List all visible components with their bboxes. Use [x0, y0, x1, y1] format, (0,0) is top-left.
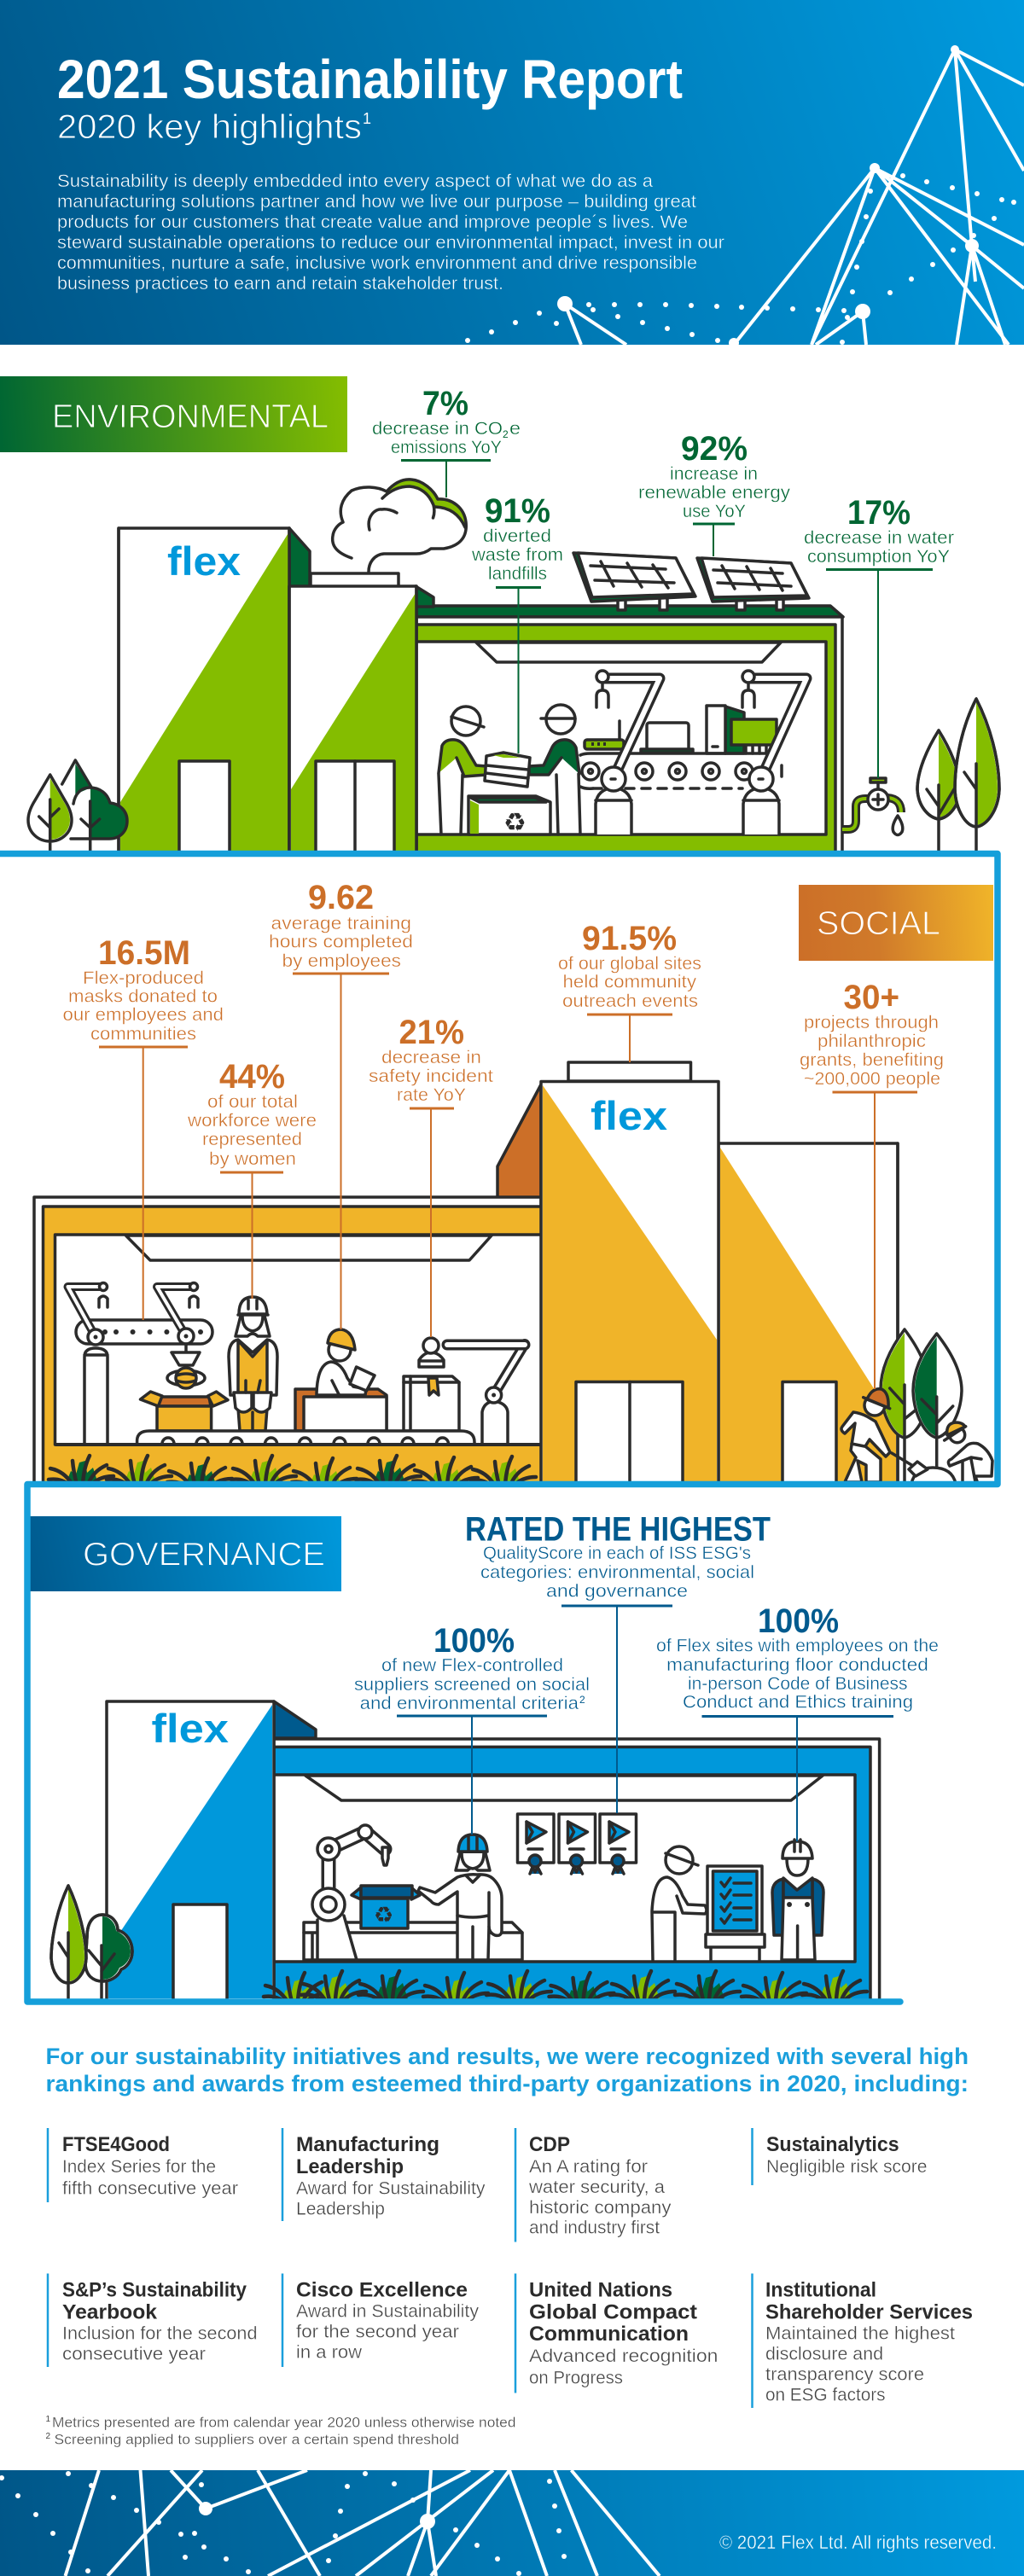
stat: 91% waste: diverted — [483, 526, 551, 546]
stat: 44% women: workforce were — [187, 1111, 317, 1131]
stat: 21% safety: rate YoY — [397, 1085, 466, 1105]
intro paragraph — [57, 172, 724, 294]
award: ISS: disclosure and — [765, 2345, 883, 2364]
section label: environmental — [0, 376, 347, 452]
person at checklist — [652, 1846, 707, 1960]
stat: 100% suppliers — [354, 1622, 590, 1835]
stat: 7% CO2e: e — [509, 419, 521, 439]
stat: 21% safety: decrease in — [381, 1048, 481, 1067]
stat: 7% CO2e: emissions YoY — [391, 438, 502, 457]
award: United Nations: on Progress — [529, 2369, 623, 2387]
award: CDP: water security, a — [528, 2178, 665, 2197]
stat: 100% suppliers: and environmental criteria — [360, 1694, 579, 1713]
work table and robot — [304, 1825, 522, 1960]
plants row governance — [264, 1971, 867, 2003]
stat: 30+ projects: philanthropic — [817, 1032, 926, 1051]
stat: 16.5M masks — [63, 934, 224, 1320]
stat: 17% water: consumption YoY — [807, 547, 950, 567]
panel: social — [34, 879, 993, 1488]
robot arm 1 — [596, 671, 660, 834]
stat: 44% women: by women — [209, 1149, 296, 1169]
stat: 7% CO2e: 7% — [422, 385, 468, 422]
award: S&P — [48, 2273, 258, 2367]
award: S&P: consecutive year — [62, 2345, 206, 2364]
stat: 100% training: Conduct and Ethics training — [683, 1693, 913, 1712]
award: United Nations: United Nations — [529, 2278, 672, 2302]
stat: 16.5M masks: Flex-produced — [83, 968, 204, 988]
stat: 9.62 training: by employees — [282, 951, 401, 971]
stat: 44% women: represented — [202, 1130, 302, 1149]
stat: 30+ projects: projects through — [804, 1013, 939, 1032]
tower — [119, 528, 310, 853]
footer network graphic — [0, 2470, 660, 2576]
award: ISS: Institutional — [765, 2278, 876, 2302]
stat: 91% waste: waste from — [471, 545, 563, 565]
award: CDP: An A rating for — [529, 2157, 648, 2177]
open box — [140, 1392, 228, 1431]
award: CDP: historic company — [529, 2198, 672, 2218]
stat: rated the highest: QualityScore in each of ISS ESG's — [483, 1544, 751, 1563]
award: Cisco — [282, 2273, 479, 2367]
award: ISS: Maintained the highest — [765, 2324, 955, 2343]
award: FTSE4Good — [48, 2128, 238, 2202]
copyright: © 2021 Flex Ltd. All rights reserved. — [719, 2532, 997, 2553]
awards heading — [46, 2044, 969, 2096]
trees left — [28, 760, 127, 851]
stat: 91.5% outreach: held community — [563, 973, 697, 991]
social building — [34, 1062, 992, 1488]
stat: 9.62 training: average training — [271, 914, 411, 933]
recycling box: ♻ — [374, 1903, 393, 1928]
trees right — [917, 699, 999, 852]
award: CDP: CDP — [529, 2133, 570, 2156]
subtitle: 2020 key highlights — [57, 108, 362, 146]
stat: 92% renewable: use YoY — [683, 502, 746, 521]
panel: environmental — [0, 376, 999, 854]
stat: 91% waste: landfills — [488, 564, 547, 584]
award: Cisco: in a row — [296, 2343, 363, 2362]
footer banner — [0, 2470, 1024, 2576]
award: ISS: transparency score — [765, 2365, 924, 2384]
stat: 100% suppliers: suppliers screened on social — [354, 1675, 590, 1695]
subtitle: 1 — [363, 110, 371, 127]
section label: governance — [30, 1516, 341, 1591]
stat: 91.5% outreach: 91.5% — [582, 920, 677, 957]
seated worker with tablet — [295, 1329, 387, 1431]
recycling box — [352, 1886, 420, 1928]
header banner — [0, 0, 1024, 348]
award: CDP — [515, 2128, 672, 2242]
camera robot arm — [419, 1338, 525, 1444]
stat: 44% women: of our total — [207, 1092, 298, 1112]
tower: flex — [167, 538, 241, 584]
stat: 92% renewable: increase in — [670, 464, 758, 484]
stat: 100% training — [656, 1602, 939, 1841]
certificates — [517, 1814, 637, 1874]
stat: 44% women: 44% — [219, 1058, 285, 1096]
woman with box — [418, 1835, 502, 1960]
section frame lines — [0, 853, 998, 2002]
award: Manufacturing Leadership — [282, 2128, 486, 2221]
intro paragraph: communities, nurture a safe, inclusive work environment and drive responsible — [57, 253, 697, 273]
award: FTSE4Good: Index Series for the — [62, 2157, 216, 2177]
stat: 9.62 training: hours completed — [269, 932, 413, 952]
panel: awards — [46, 2044, 973, 2447]
stat: 30+ projects: grants, benefiting — [800, 1050, 944, 1070]
stat: 100% training: in-person Code of Business — [688, 1674, 908, 1694]
award: Manufacturing Leadership: Leadership — [296, 2200, 385, 2218]
annex roof and body — [416, 606, 843, 854]
award: FTSE4Good: fifth consecutive year — [62, 2179, 238, 2198]
stat: 92% renewable: 92% — [681, 430, 748, 468]
stat: 7% CO2e — [372, 385, 521, 497]
award: United Nations — [515, 2273, 719, 2393]
stat: 100% suppliers: of new Flex-controlled — [381, 1655, 563, 1676]
intro paragraph: steward sustainable operations to reduce our environmental impact, invest in our — [57, 233, 724, 253]
second block and chimney — [289, 573, 433, 853]
section label: environmental: ENVIRONMENTAL — [52, 398, 329, 435]
tower — [107, 1701, 316, 2002]
tower and chimney: flex — [591, 1093, 667, 1138]
footnotes: Metrics presented are from calendar year 2020 unless otherwise noted — [52, 2415, 515, 2430]
stat: 100% training: of Flex sites with employees on the — [656, 1637, 939, 1655]
trees governance — [51, 1886, 132, 1998]
gripper holding mask — [167, 1344, 205, 1388]
award: United Nations: Global Compact — [529, 2300, 697, 2324]
stat: 100% suppliers: 100% — [433, 1622, 515, 1660]
stat: 100% training: manufacturing floor conducted — [666, 1655, 928, 1675]
stat: 91.5% outreach: outreach events — [562, 991, 698, 1011]
stat: 17% water: 17% — [847, 494, 911, 532]
bottom conveyor — [55, 1431, 541, 1445]
water faucet — [842, 778, 903, 834]
panel: governance — [30, 1510, 939, 2003]
award: Sustainalytics: Sustainalytics — [766, 2133, 899, 2156]
stat: 44% women — [187, 1058, 317, 1299]
stat: 91.5% outreach: of our global sites — [558, 954, 701, 974]
recycling bin — [468, 796, 550, 838]
award: CDP: and industry first — [529, 2218, 660, 2237]
governance building — [51, 1701, 880, 2003]
stat: 30+ projects: ~200,000 people — [804, 1069, 940, 1089]
award: Manufacturing Leadership: Manufacturing — [296, 2133, 439, 2156]
stat: 16.5M masks: 16.5M — [98, 934, 190, 972]
stat: 7% CO2e: 2 — [503, 428, 509, 440]
stat: rated the highest: RATED THE HIGHEST — [465, 1510, 771, 1548]
conveyor and equipment — [580, 706, 782, 788]
factory hall — [34, 1084, 541, 1488]
awards heading: rankings and awards from esteemed third-party organizations in 2020, including: — [46, 2071, 969, 2096]
award: ISS: Shareholder Services — [765, 2300, 973, 2324]
solar panels — [573, 553, 809, 610]
worker in overalls — [772, 1840, 823, 1960]
award: Manufacturing Leadership: Award for Sustainability — [296, 2179, 486, 2198]
tower and chimney — [541, 1062, 719, 1488]
recycling bin: ♻ — [503, 808, 527, 838]
sealed box — [404, 1376, 459, 1431]
stat: 92% renewable — [638, 430, 791, 556]
robot arm 2 — [742, 671, 806, 834]
award: Cisco: for the second year — [296, 2323, 459, 2341]
footnotes: 2 — [46, 2432, 51, 2441]
right block — [719, 1143, 898, 1488]
stat: 21% safety: safety incident — [369, 1067, 493, 1086]
stat: rated the highest — [465, 1510, 771, 1813]
stat: 91% waste: 91% — [485, 492, 550, 530]
stat: 9.62 training — [269, 879, 413, 1329]
cloud — [333, 480, 466, 572]
award: S&P: Yearbook — [62, 2300, 158, 2324]
stat: 92% renewable: renewable energy — [638, 483, 791, 503]
intro paragraph: manufacturing solutions partner and how we live our purpose – building great — [57, 192, 696, 212]
award: ISS — [753, 2273, 973, 2408]
award: Manufacturing Leadership: Leadership — [296, 2155, 404, 2178]
award: United Nations: Communication — [529, 2323, 689, 2346]
stat: 17% water — [804, 494, 954, 778]
award: Sustainalytics: Negligible risk score — [766, 2157, 927, 2177]
award: Cisco: Cisco Excellence — [296, 2278, 468, 2302]
award: Sustainalytics — [753, 2128, 927, 2185]
stat: 7% CO2e: decrease in CO — [372, 419, 503, 439]
tower: flex — [152, 1706, 229, 1751]
award: ISS: on ESG factors — [765, 2386, 886, 2404]
stat: rated the highest: categories: environmental, social — [480, 1563, 754, 1582]
stat: 21% safety — [369, 1014, 493, 1337]
award: Cisco: Award in Sustainability — [296, 2302, 479, 2321]
section label: social — [799, 885, 993, 961]
stat: 16.5M masks: communities — [90, 1024, 196, 1044]
footnotes — [46, 2415, 515, 2447]
intro paragraph: business practices to earn and retain stakeholder trust. — [57, 274, 503, 294]
footnotes: 1 — [46, 2415, 51, 2424]
stat: 21% safety: 21% — [399, 1014, 464, 1051]
woman worker — [229, 1297, 277, 1431]
stat: 9.62 training: 9.62 — [308, 879, 374, 916]
stat: 30+ projects: 30+ — [843, 979, 899, 1016]
checklist board — [706, 1866, 765, 1960]
intro paragraph: Sustainability is deeply embedded into every aspect of what we do as a — [57, 172, 653, 191]
stat: 91.5% outreach — [558, 920, 701, 1062]
award: S&P: S&P’s Sustainability — [62, 2278, 247, 2302]
environmental building — [28, 480, 999, 854]
award: S&P: Inclusion for the second — [62, 2324, 258, 2343]
stat: 30+ projects — [800, 979, 944, 1389]
award: FTSE4Good: FTSE4Good — [62, 2133, 170, 2156]
stat: 17% water: decrease in water — [804, 528, 954, 548]
award: United Nations: Advanced recognition — [529, 2346, 719, 2366]
title: 2021 Sustainability Report — [57, 49, 683, 110]
section label: social: SOCIAL — [817, 905, 940, 942]
trees and gardeners — [841, 1143, 992, 1486]
stat: rated the highest: and governance — [546, 1582, 688, 1601]
intro paragraph: products for our customers that create value and improve people´s lives. We — [57, 212, 688, 232]
network graphic — [465, 45, 1024, 348]
robot arms over conveyor — [68, 1283, 212, 1445]
awards heading: For our sustainability initiatives and results, we were recognized with several high — [46, 2044, 969, 2069]
hall — [274, 1739, 880, 2002]
stat: 100% training: 100% — [758, 1602, 839, 1640]
stat: 91% waste — [471, 492, 563, 753]
stat: 16.5M masks: our employees and — [63, 1005, 224, 1025]
footnotes: Screening applied to suppliers over a certain spend threshold — [55, 2432, 459, 2447]
stat: 16.5M masks: masks donated to — [68, 986, 218, 1007]
section label: governance: GOVERNANCE — [83, 1536, 325, 1573]
workers handling server — [439, 705, 580, 834]
plants row social — [46, 1454, 538, 1481]
stat: 100% suppliers: 2 — [579, 1694, 585, 1706]
